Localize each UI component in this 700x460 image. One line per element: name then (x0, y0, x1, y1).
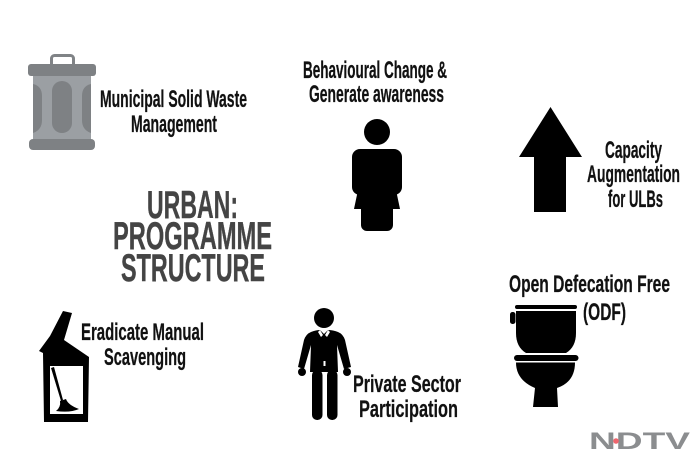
label: capacity augmentation (587, 137, 680, 213)
title: PROGRAMME (113, 215, 272, 258)
label: municipal solid waste management: Management (131, 111, 217, 138)
label: behavioural change (303, 57, 447, 108)
label: behavioural change: Generate awareness (309, 81, 444, 108)
label: eradicate manual scavenging: Eradicate Manual (81, 319, 204, 346)
label: behavioural change: Behavioural Change & (303, 57, 447, 84)
icon: businessperson (298, 308, 351, 420)
icon: person (352, 119, 402, 231)
icon: manual scavenging house with mop (39, 311, 89, 422)
label: open defecation free (509, 271, 670, 326)
title (113, 184, 272, 290)
logo: NDTV (589, 428, 690, 455)
label: private sector participation (353, 371, 461, 423)
icon: up arrow (519, 107, 582, 212)
label: open defecation free: (ODF) (583, 299, 626, 326)
label: eradicate manual scavenging (81, 319, 204, 371)
title: URBAN: (147, 184, 238, 227)
label: municipal solid waste management (100, 86, 247, 138)
label: municipal solid waste management: Municipal Solid Waste (100, 86, 247, 113)
icon: trash can (28, 56, 96, 150)
label: eradicate manual scavenging: Scavenging (104, 344, 186, 371)
label: private sector participation: Participation (359, 396, 458, 423)
icon: toilet (510, 305, 578, 407)
label: private sector participation: Private Sector (353, 371, 461, 398)
title: STRUCTURE (121, 247, 265, 290)
logo: NDTV: NDTV (589, 428, 690, 455)
